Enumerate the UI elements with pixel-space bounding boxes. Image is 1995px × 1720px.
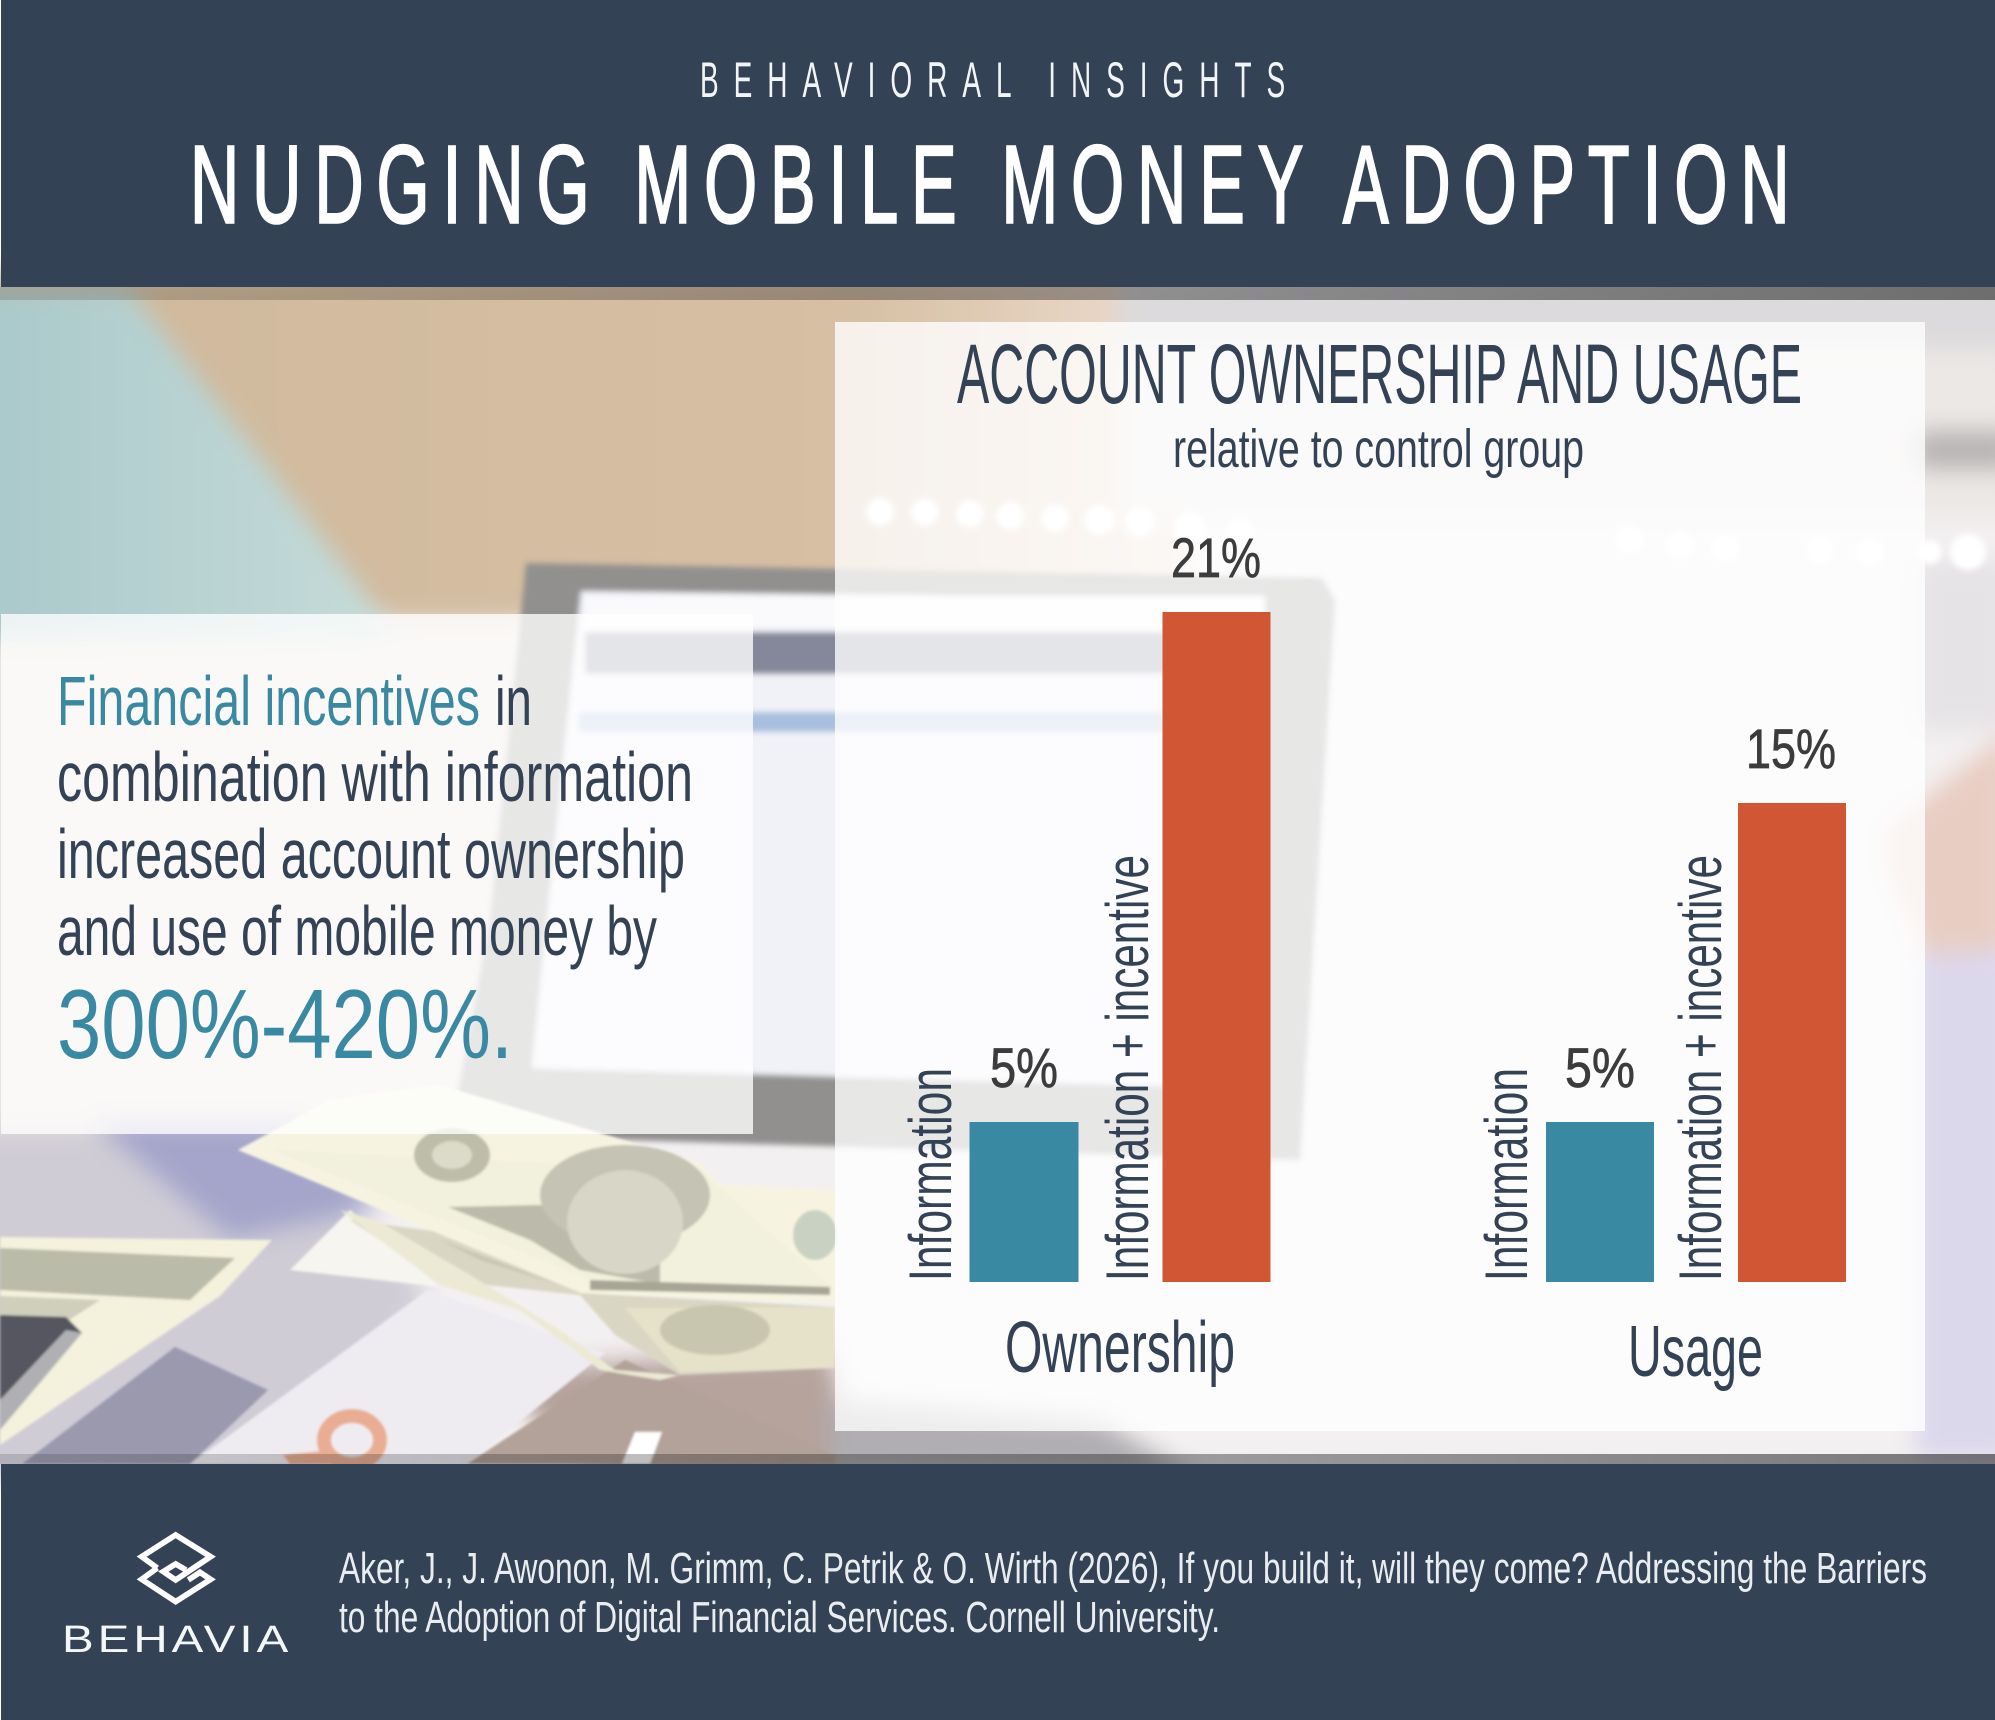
icon: Behavia logo mark — [142, 1535, 211, 1602]
left banknote — [0, 1237, 272, 1445]
value: 5%: 5% — [990, 1036, 1058, 1099]
bar group: usage — [1473, 717, 1846, 1392]
background photo: laptop and money — [0, 270, 1995, 1480]
bar: ownership information — [970, 1122, 1078, 1282]
finding text block: combination with information — [57, 738, 693, 816]
bar: usage information — [1546, 1122, 1654, 1282]
category label: usage: Usage — [1628, 1312, 1763, 1392]
main title: NUDGING MOBILE MONEY ADOPTION — [190, 124, 1790, 247]
bar: usage information plus incentive — [1738, 803, 1846, 1282]
white and rear banknote — [290, 1210, 440, 1287]
value: 21%: 21% — [1171, 526, 1261, 589]
top shadow band — [0, 287, 1995, 300]
logo wordmark: BEHAVIA — [62, 1618, 289, 1661]
panel: key finding — [1, 614, 753, 1134]
bar label: information: Information — [1473, 1068, 1540, 1281]
big percentage: 300%-420%. — [57, 969, 513, 1079]
panel: account ownership and usage chart — [835, 322, 1925, 1431]
lower left paper, purple surface, phone and notes — [22, 1347, 268, 1464]
finding text block: in — [495, 662, 532, 740]
finding text block — [57, 662, 693, 970]
category label: ownership: Ownership — [1005, 1308, 1235, 1388]
citation: to the Adoption of Digital Financial Services. Cornell University. — [339, 1593, 1220, 1642]
main banknote — [238, 1085, 835, 1303]
bar group: ownership — [897, 526, 1270, 1388]
bar label: information + incentive: Information + incentive — [1094, 855, 1161, 1281]
bottom shadow band — [0, 1454, 1995, 1464]
numeral on paper — [324, 1416, 380, 1464]
value: 15%: 15% — [1746, 717, 1836, 780]
finding text block: increased account ownership — [57, 815, 685, 893]
bar label: information: Information — [897, 1068, 964, 1281]
chart subtitle: relative to control group — [1173, 419, 1584, 479]
footer band — [1, 1464, 1995, 1720]
header band — [1, 0, 1995, 287]
bar label: information + incentive: Information + incentive — [1667, 855, 1734, 1281]
highlighted lead text: Financial incentives — [57, 662, 480, 740]
bar: ownership information plus incentive — [1162, 612, 1270, 1282]
eyebrow heading: BEHAVIORAL INSIGHTS — [700, 51, 1285, 108]
value: 5%: 5% — [1565, 1036, 1635, 1099]
citation — [339, 1544, 1927, 1642]
finding text block: and use of mobile money by — [57, 892, 657, 970]
